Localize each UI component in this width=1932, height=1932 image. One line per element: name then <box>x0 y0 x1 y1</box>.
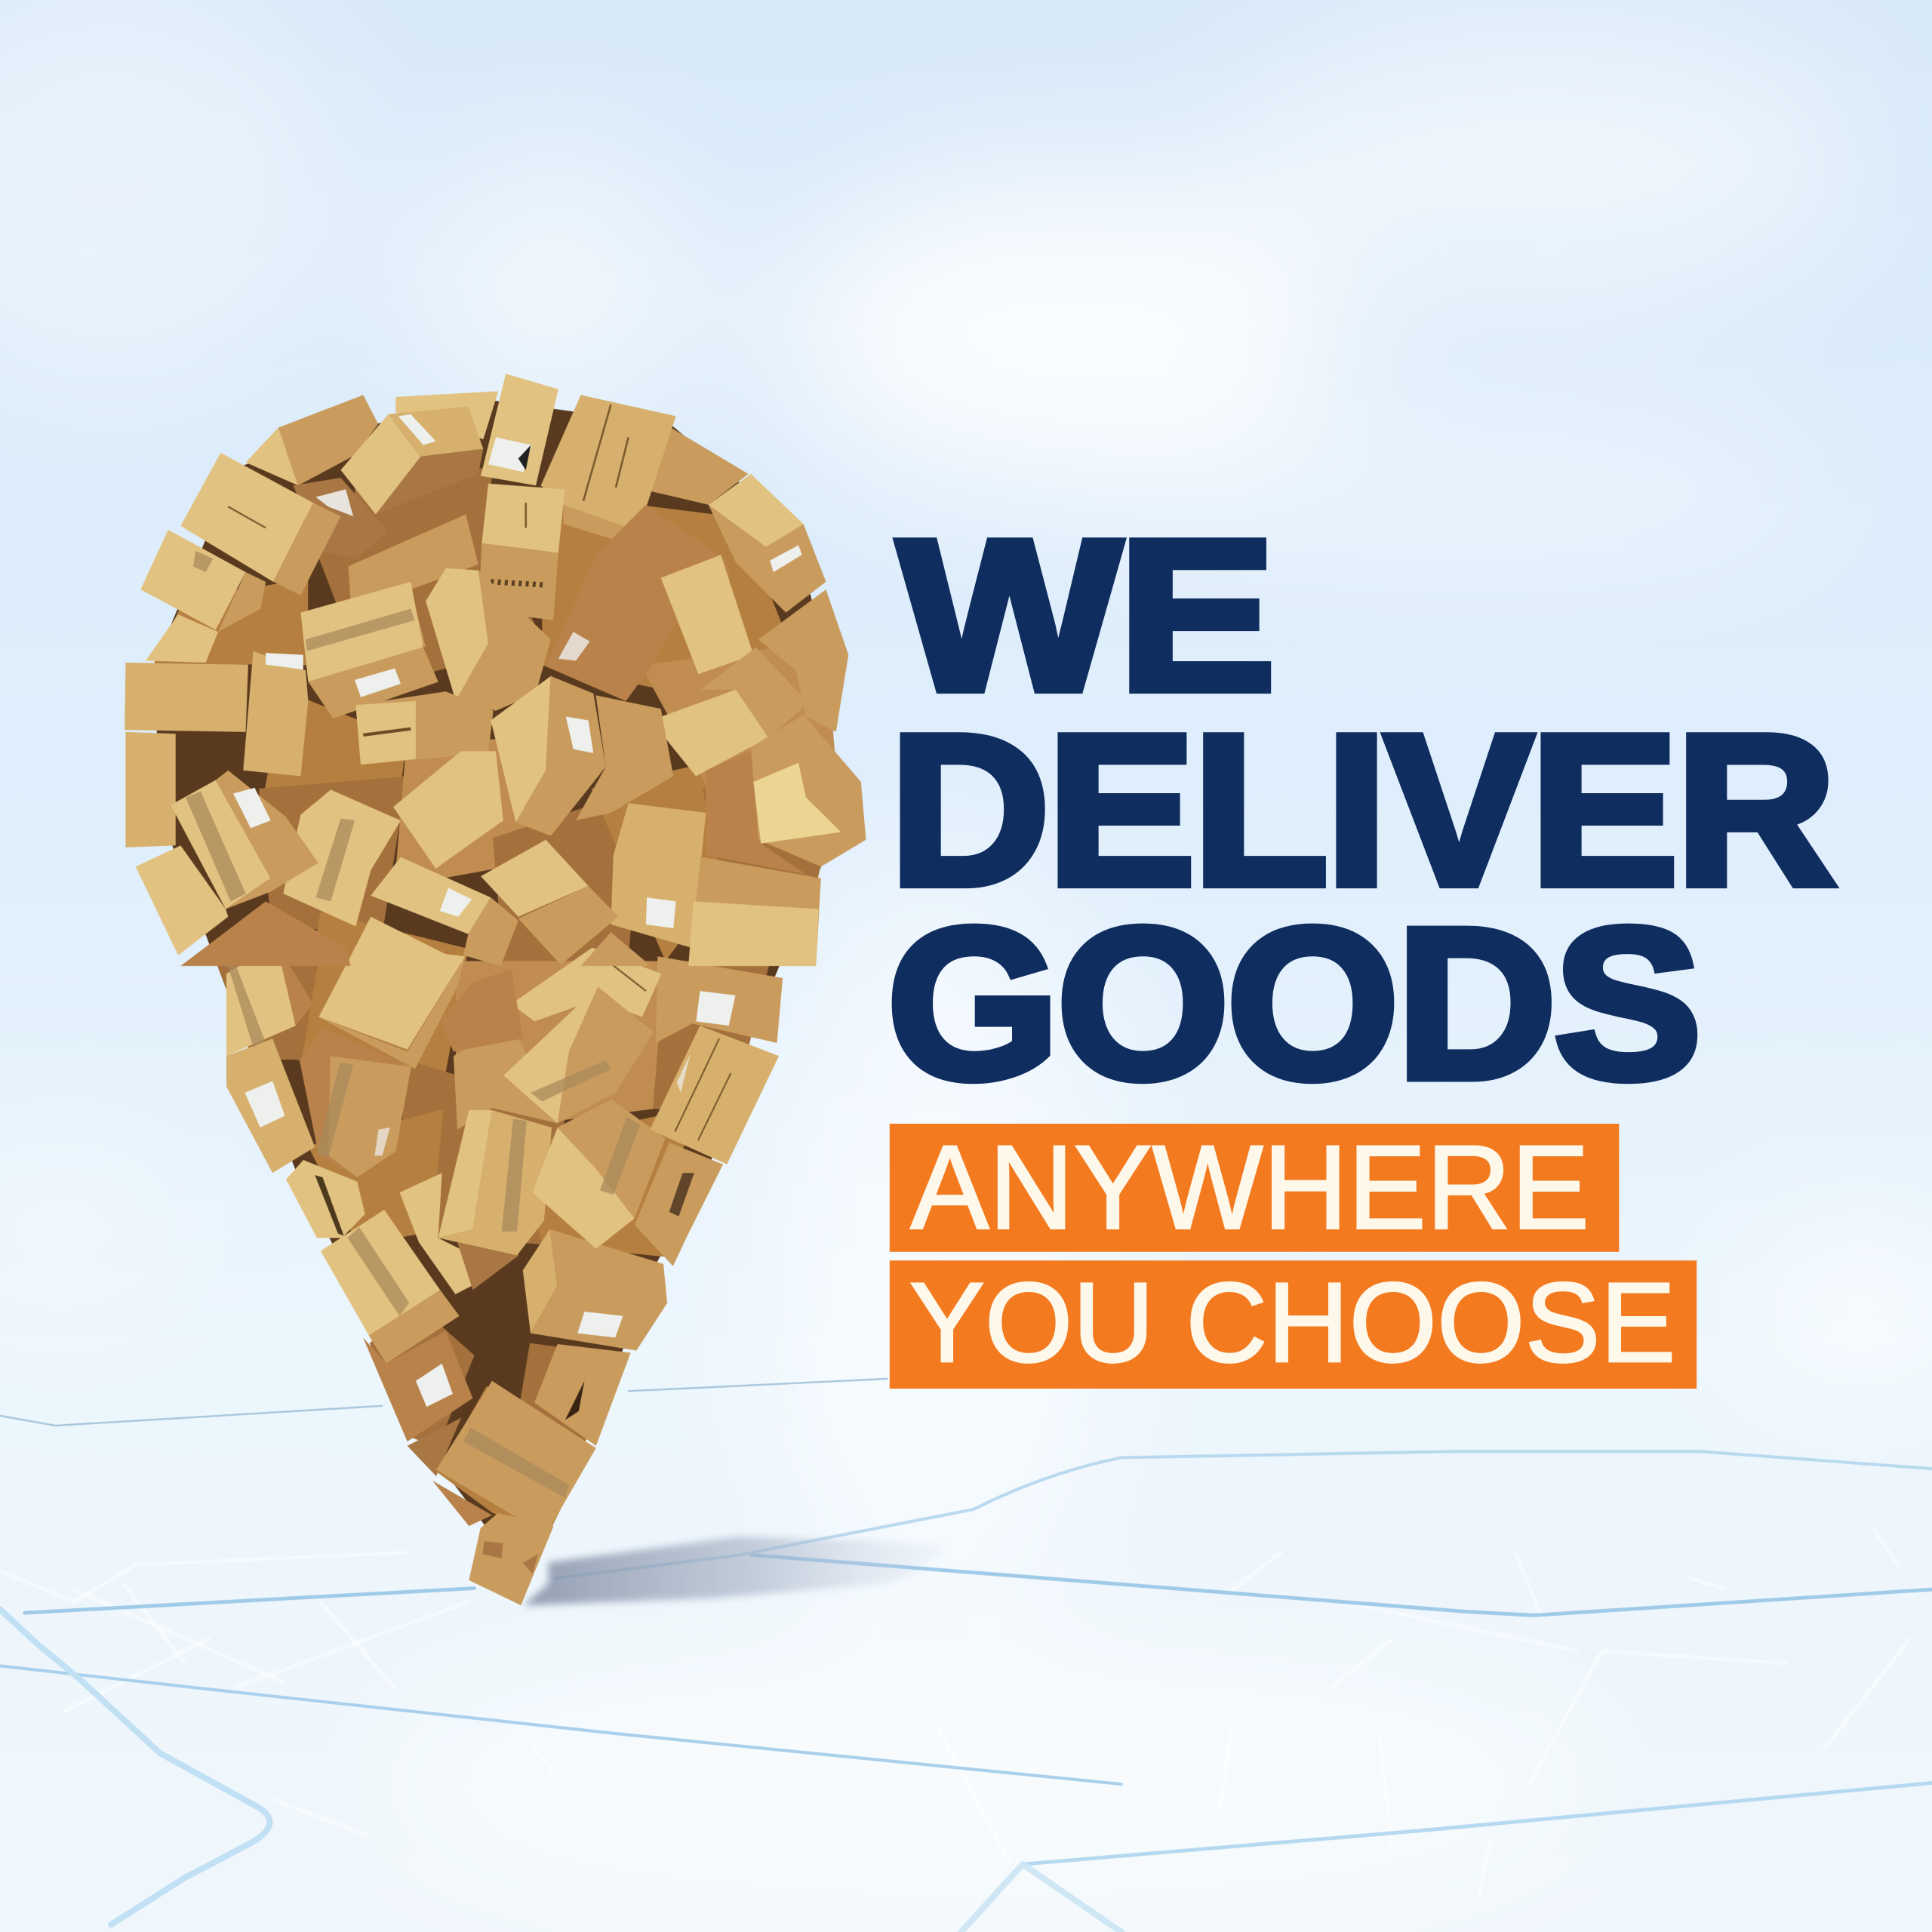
box: left <box>140 530 266 632</box>
box: shadowed with label <box>293 478 388 558</box>
box: dark text <box>635 1143 723 1266</box>
road: upper left <box>0 1379 888 1426</box>
box: cube <box>503 986 654 1123</box>
box: back flat <box>395 391 498 439</box>
box: right big <box>751 715 866 866</box>
box: slim right <box>661 555 753 674</box>
box: column right <box>611 803 706 948</box>
box: right cube <box>651 648 808 776</box>
box: low right <box>688 857 821 966</box>
box: tall centre <box>438 1110 552 1255</box>
box: dark orange <box>706 751 806 875</box>
box: label right <box>656 956 783 1043</box>
box: taped brown <box>300 1028 411 1177</box>
box: J <box>454 1036 558 1130</box>
box: tape left <box>283 789 401 926</box>
box: big top with slots <box>541 395 676 543</box>
box: label low centre <box>371 857 518 966</box>
road: curved <box>555 1451 1932 1578</box>
box: right edge <box>758 589 848 732</box>
box: cube right <box>533 1100 666 1249</box>
filler boxes behind <box>154 468 838 1534</box>
orange tag: YOU CHOOSE: YOU CHOOSE <box>909 1259 1675 1386</box>
box: left label <box>226 1038 315 1173</box>
box: upper left strip <box>226 943 313 1056</box>
road: thick left <box>0 1609 269 1924</box>
map roads <box>0 1379 1932 1932</box>
box: tip <box>469 1513 554 1605</box>
lower boxes <box>226 943 783 1605</box>
box: shadowed <box>408 1418 461 1476</box>
box: taped lower <box>321 1210 460 1364</box>
box: tall top <box>481 374 558 485</box>
box: with tape low <box>436 1381 596 1535</box>
box: low left with label <box>363 1331 472 1441</box>
box: strip left <box>286 1160 365 1238</box>
road: fork <box>961 1864 1121 1932</box>
box: flat low left <box>125 732 176 848</box>
box: wedge left <box>146 614 218 663</box>
box: top label <box>340 407 483 515</box>
box: upper right <box>709 474 826 613</box>
location pin made of boxes <box>125 374 866 1605</box>
box: wedge low left <box>136 845 228 955</box>
box: large pale <box>318 943 465 1069</box>
headline <box>888 496 1833 1124</box>
upper boxes <box>125 374 866 966</box>
box: with label centre <box>523 1229 667 1351</box>
headline line: WE: WE <box>898 496 1273 735</box>
box: label mid-left <box>300 582 438 718</box>
box: low mid <box>393 751 503 869</box>
box: base pale <box>346 917 463 966</box>
orange tag: ANYWHERE: ANYWHERE <box>911 1121 1589 1254</box>
box: lined right <box>650 1026 779 1164</box>
box: above tip <box>432 1481 492 1526</box>
headline line: GOODS: GOODS <box>888 884 1699 1124</box>
dark pin core <box>154 401 832 1552</box>
box: base right <box>581 932 651 966</box>
box: centre tall <box>576 695 673 820</box>
box: strip <box>511 948 661 1021</box>
box: centre with label <box>491 676 606 836</box>
box: centre <box>400 1173 519 1294</box>
road: lower diagonal <box>0 1666 1121 1784</box>
box: label tape left <box>171 771 318 909</box>
road: lower right <box>1023 1783 1932 1864</box>
box: column top <box>478 484 565 620</box>
box: base orange <box>180 901 351 966</box>
box: brown mid <box>348 515 478 648</box>
box: flat left <box>125 663 248 732</box>
box: low right <box>534 1344 631 1446</box>
box: dark mid <box>546 555 678 701</box>
box: centre cube <box>426 568 551 711</box>
box: dark right <box>596 505 731 620</box>
box: lower centre <box>481 840 618 964</box>
box: column left <box>243 651 308 776</box>
road: main horizon <box>25 1555 1932 1615</box>
box: top left <box>246 395 378 485</box>
box: back right <box>651 428 749 505</box>
headline line: DELIVER: DELIVER <box>890 691 1833 930</box>
box: large left <box>180 453 340 595</box>
faint white street grid <box>0 1527 1910 1897</box>
ground shadow of pin <box>524 1537 949 1605</box>
box: brown side <box>440 969 523 1051</box>
box: slot mid <box>355 691 494 764</box>
